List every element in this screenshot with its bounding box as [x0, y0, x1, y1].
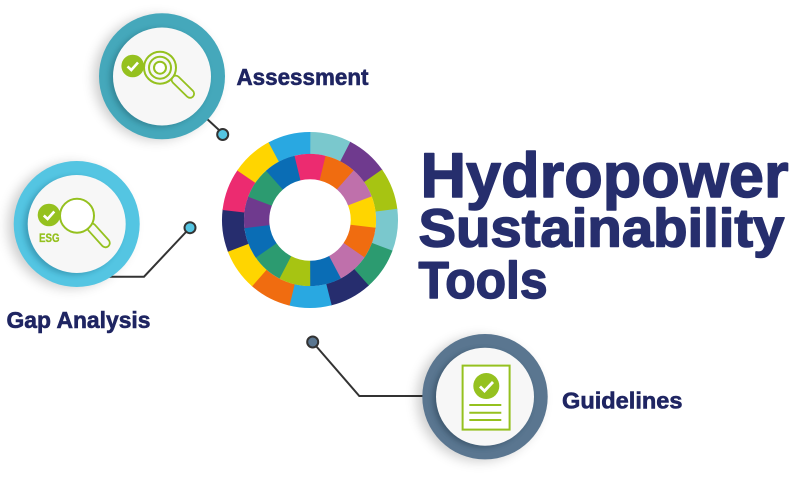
icon: assessment magnifier — [144, 52, 190, 94]
inner ring — [235, 145, 385, 295]
title: Sustainability — [418, 198, 784, 258]
title: Tools — [418, 252, 548, 310]
title — [418, 141, 788, 310]
connector: gap analysis — [105, 222, 196, 277]
panel: gap analysis badge — [8, 161, 140, 288]
icon: guidelines document — [463, 366, 510, 430]
panel: guidelines badge — [417, 334, 548, 461]
chart: colour wheel — [201, 111, 419, 329]
icon: assessment check badge — [121, 55, 144, 77]
icon: gap magnifier — [60, 199, 106, 243]
ESG label: ESG — [39, 233, 60, 245]
title: Hydropower — [420, 141, 788, 211]
panel: assessment badge — [94, 13, 225, 140]
label: assessment: Assessment — [236, 64, 369, 90]
icon: gap check badge — [38, 204, 60, 226]
outer ring — [201, 111, 419, 329]
connector: guidelines — [307, 336, 428, 396]
label: guidelines: Guidelines — [562, 387, 682, 413]
label: gap analysis: Gap Analysis — [6, 307, 150, 333]
connector: assessment — [206, 118, 228, 140]
